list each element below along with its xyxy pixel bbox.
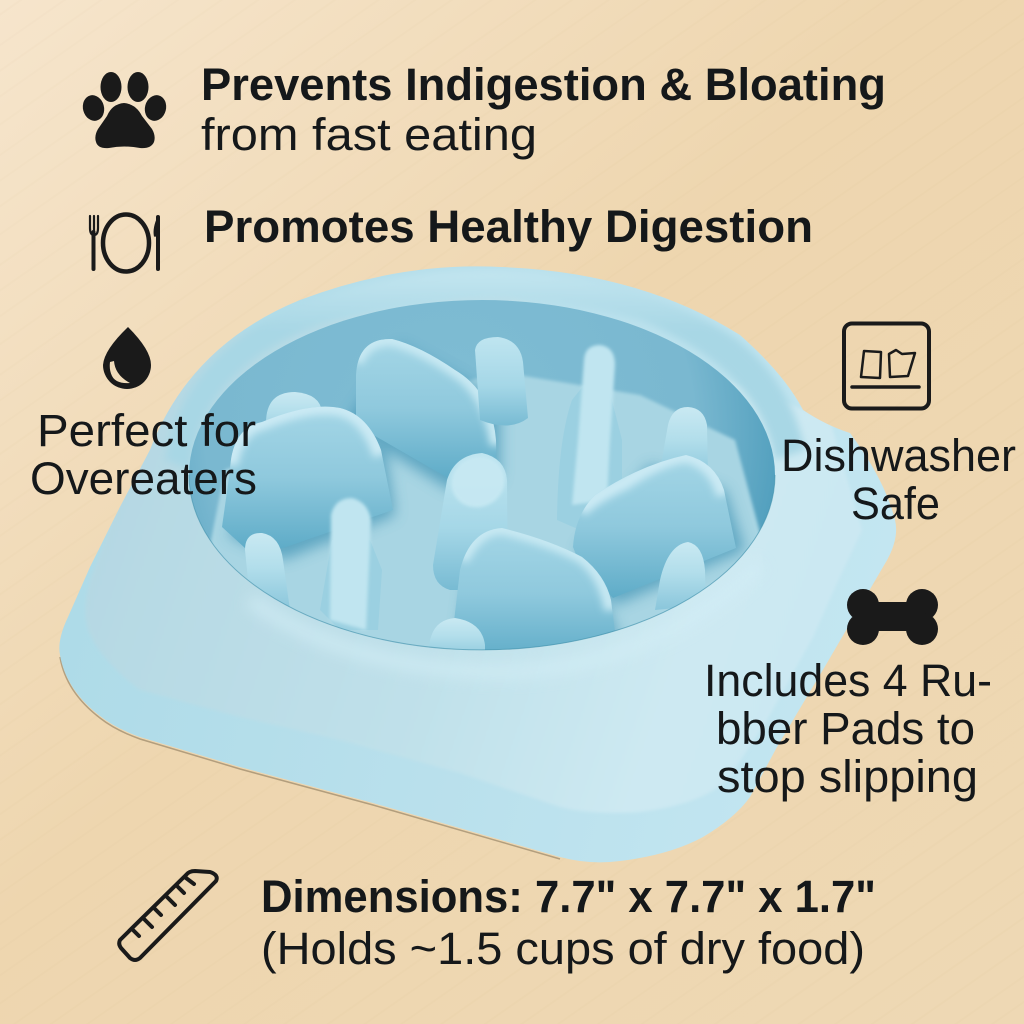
bowl contact shadow: [60, 657, 560, 859]
slow feeder bowl: [59, 266, 896, 862]
bowl outer body: [59, 266, 896, 862]
label: Includes 4 Ru-: [704, 655, 992, 706]
subheading: from fast eating: [201, 109, 537, 160]
feature: dishwasher safe: [781, 324, 1016, 529]
label line three: stop slipping: [717, 751, 978, 802]
feature: overeaters: [30, 327, 257, 504]
peg: right front: [655, 542, 706, 610]
block: left: [222, 407, 393, 548]
heading: Dimensions: 7.7" x 7.7" x 1.7": [261, 871, 876, 922]
dark shadows: [228, 345, 745, 640]
peg: tall thin: [557, 345, 622, 530]
block: back left: [356, 339, 497, 478]
peg: front small: [431, 618, 485, 650]
label line two: bber Pads to: [716, 703, 975, 754]
inner rim edge: [189, 475, 775, 650]
peg: center: [433, 453, 508, 590]
bowl body surface: [85, 270, 862, 813]
heading: Prevents Indigestion & Bloating: [201, 59, 886, 110]
peg top: center: [451, 458, 504, 508]
peg: tall front: [320, 498, 382, 630]
heading: Promotes Healthy Digestion: [204, 201, 813, 252]
bowl interior: [205, 337, 762, 660]
icon: paw: [80, 72, 169, 148]
icon: ruler: [119, 871, 217, 960]
icon: plate and cutlery: [90, 214, 158, 272]
block: right: [573, 455, 736, 598]
upper rim tone: [165, 270, 805, 470]
peg: left front: [245, 533, 290, 610]
feature: rubber pads: [704, 589, 992, 802]
icon: bone: [847, 589, 938, 645]
label line two: Safe: [851, 478, 940, 529]
feature: promotes digestion: [90, 201, 813, 272]
feature: prevents indigestion: [80, 59, 886, 160]
peg: back center: [475, 337, 528, 426]
block: front: [453, 528, 616, 660]
icon: drop: [103, 327, 151, 389]
peg: right back: [666, 407, 708, 465]
label: Dishwasher: [781, 430, 1016, 481]
front rim highlight: [252, 600, 454, 673]
peg: back left: [266, 392, 320, 420]
label line two: Overeaters: [30, 453, 257, 504]
icon: dishwasher: [844, 324, 929, 408]
label: Perfect for: [37, 405, 256, 456]
subheading: (Holds ~1.5 cups of dry food): [261, 923, 865, 974]
feature: dimensions: [119, 871, 876, 974]
bowl floor: [205, 372, 762, 660]
inner bowl wall: [189, 300, 775, 650]
